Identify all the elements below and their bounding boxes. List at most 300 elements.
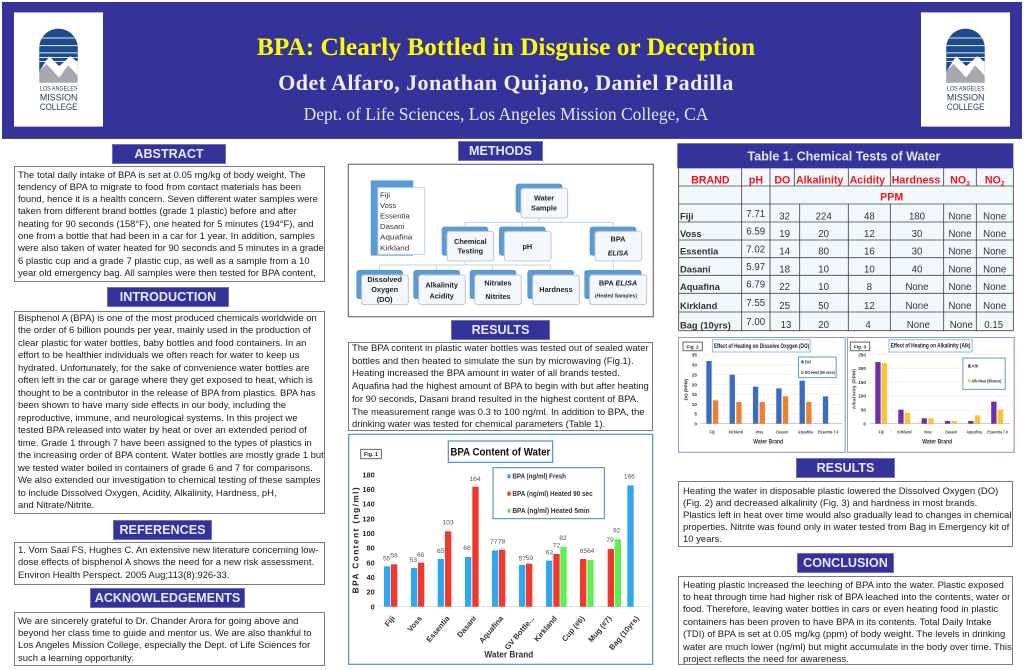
logo: Los Angeles Mission College (left): MISSION	[40, 92, 77, 103]
table brand names: Fiji	[680, 211, 693, 221]
data labels: 82	[559, 535, 567, 542]
text: conclusion: Heating plastic increased the leeching of BPA into the water. Plastic exposed	[683, 580, 1004, 590]
table values: 50	[818, 301, 829, 312]
table values: 40	[912, 264, 922, 275]
table values: None	[948, 229, 972, 240]
table values: None	[905, 282, 929, 293]
y axis: 180	[362, 470, 375, 479]
x axis labels: Aquafina	[798, 430, 814, 435]
x axis labels: Fiji	[383, 614, 397, 628]
box: dissolved oxygen: Dissolved	[367, 275, 402, 284]
heading: results (right)	[796, 458, 895, 478]
table values: 80	[818, 247, 829, 258]
x axis labels: Kirkland	[897, 430, 912, 435]
table header row	[691, 174, 1005, 204]
text: acknowledgements: beyond her class time to guide and mentor us. We are also thankful to	[18, 628, 312, 639]
text: introduction: thought to be a contributor in the release of BPA from plastics. BPA has	[18, 388, 316, 398]
table values: 20	[818, 229, 829, 240]
table values: 18	[779, 264, 790, 275]
table values: 10	[818, 264, 829, 275]
text: references: dose effects of bisphenol A shows the need for a new risk assessment.	[18, 557, 314, 568]
y axis: 200	[858, 366, 866, 371]
figure tag: Fig. 2	[687, 344, 699, 349]
header banner	[2, 2, 1022, 139]
x axis labels: Aquafina	[477, 614, 506, 645]
data labels: 92	[613, 527, 621, 534]
text: references: 1. Vom Saal FS, Hughes C. An extensive new literature concerning low-	[18, 545, 319, 556]
y axis: 160	[362, 485, 375, 494]
data labels: 57	[519, 556, 526, 563]
panel: figure 2 dissolved oxygen chart	[678, 337, 846, 453]
x axis labels: Water Brand	[484, 650, 534, 660]
box: alkalinity and acidity: Acidity	[429, 292, 455, 301]
table values: 180	[909, 211, 925, 222]
box: brand list: Kirkland	[380, 243, 409, 252]
text: abstract: The total daily intake of BPA is set at 0.05 mg/kg of body weight. The	[18, 170, 306, 180]
logo: Los Angeles Mission College (right)	[921, 12, 1010, 127]
text: introduction: reproductive, immune, and neurological systems. In this project we	[18, 412, 297, 424]
x axis labels: Kirkland	[729, 430, 743, 435]
box: brand list: Aquafina	[380, 233, 413, 242]
x axis labels: Dasani	[945, 430, 957, 435]
box: BPA ELISA	[590, 227, 642, 261]
data labels: 72	[553, 543, 560, 550]
y axis: 140	[362, 500, 375, 509]
legend: Alk	[972, 364, 979, 369]
table values: 7.00	[746, 317, 765, 328]
y axis: 250	[858, 352, 866, 357]
bars: alkalinity	[875, 362, 997, 424]
heading: methods: METHODS	[469, 144, 532, 158]
text: conclusion: water are much lower (ng/ml) but might accumulate in the body over time. This	[683, 642, 1012, 653]
table values: 6.59	[746, 227, 765, 238]
figure tag: Fig. 1	[364, 452, 378, 458]
box: dissolved oxygen: Oxygen	[371, 285, 399, 294]
text: acknowledgements: Los Angeles Mission College, especially the Dept. of Life Sciences for	[18, 640, 310, 651]
data labels: 64	[587, 548, 595, 555]
x axis labels: Dasani	[455, 614, 478, 639]
table header row: Hardness	[892, 174, 940, 186]
box: pH	[499, 227, 551, 261]
box: chemical testing	[442, 227, 494, 261]
text: results (right): Heating the water in disposable plastic lowered the Dissolved Oxygen (DO)	[683, 486, 998, 497]
data labels: 103	[442, 519, 454, 526]
table values: 16	[864, 247, 875, 258]
x axis labels: Water Brand	[922, 439, 952, 446]
text: conclusion	[678, 576, 1013, 665]
y axis: 100	[362, 529, 375, 538]
logo: Los Angeles Mission College (right): LOS ANGELES	[947, 85, 985, 92]
table values: 32	[779, 211, 790, 222]
x axis labels	[710, 430, 839, 446]
x axis labels: Water Brand	[753, 439, 783, 446]
bars: fresh	[384, 485, 634, 607]
logo: Los Angeles Mission College (right): COLLEGE	[947, 102, 984, 113]
table values: None	[948, 211, 972, 222]
logo: Los Angeles Mission College (left): LOS ANGELES	[40, 85, 78, 92]
table values: None	[950, 320, 973, 331]
y axis: 30	[692, 363, 697, 368]
text: abstract: heating for 90 seconds (158°F), one heated for 5 minutes (194°F), and	[18, 219, 314, 230]
table values: 10	[818, 282, 829, 293]
table values: 30	[912, 247, 922, 258]
figure tag	[683, 342, 702, 351]
x axis labels: Fiji	[879, 430, 884, 435]
box: BPA ELISA heated samples	[584, 270, 647, 305]
y axis: 50	[861, 408, 866, 413]
x axis labels: Voss	[924, 430, 932, 435]
heading: results (middle): RESULTS	[472, 323, 529, 337]
box: chemical testing: Chemical	[454, 237, 487, 246]
text: abstract: found, hence it is a health concern. Seven different water samples were	[18, 194, 318, 205]
heading: abstract	[112, 144, 226, 164]
heading: conclusion: CONCLUSION	[803, 556, 888, 570]
text: results (right): Plastics left in heat over time would also gradually lead to changes in chemical	[683, 510, 1011, 521]
table values: 20	[818, 320, 829, 331]
x axis labels	[383, 614, 641, 660]
text: results (middle): bottles and then heated to simulate the sun by microwaving (Fig.1).	[352, 356, 634, 367]
text: introduction: we tested water boiled in containers of grade 6 and 7 for comparisons.	[18, 462, 313, 474]
data labels: 55	[383, 555, 391, 562]
text: introduction: the order of 6 billion pounds per year, mainly used in the production of	[18, 325, 311, 336]
y axis: 20	[692, 382, 697, 387]
box: nitrates and nitrites: Nitrates	[484, 278, 512, 287]
data labels: 164	[469, 476, 481, 483]
text: introduction: Bisphenol A (BPA) is one of the most produced chemicals worldwide on	[18, 312, 317, 324]
data labels: 65	[580, 548, 587, 555]
text: results (middle): The measurement range was 0.3 to 100 ng/ml. In addition to BPA, the	[352, 407, 644, 418]
table values: None	[907, 320, 930, 331]
x axis labels: Essentia 7.0	[987, 430, 1008, 435]
text: conclusion: (TDI) of BPA is set at 0.05 mg/kg (ppm) of body weight. The levels in drinking	[683, 629, 1005, 640]
logo: Los Angeles Mission College (right): MISSION	[947, 92, 984, 103]
box: BPA ELISA heated samples: BPA ELISA	[599, 278, 637, 287]
legend: BPA (ng/ml) Heated 90 sec	[512, 491, 593, 498]
box: brand list	[371, 180, 425, 256]
text: results (right): (Fig. 2) and decreased alkalinity (Fig. 3) and hardness in most brands.	[683, 498, 977, 509]
table values: 12	[864, 301, 875, 312]
table values: None	[948, 282, 972, 293]
panel: methods flowchart	[348, 164, 654, 318]
table header row: DO	[774, 174, 790, 186]
table values: None	[983, 264, 1006, 275]
box: dissolved oxygen	[356, 270, 408, 305]
legend	[799, 357, 836, 378]
table header row: 3	[966, 180, 970, 187]
table values: 13	[781, 320, 791, 331]
y axis: 40	[367, 573, 375, 582]
data labels: 63	[546, 550, 553, 557]
y axis: 150	[858, 380, 866, 385]
legend: Alk-Heat (90secs)	[972, 379, 1002, 384]
text: introduction: the increasing order of BPA content. Water bottles are mostly grade 1 but	[18, 450, 324, 461]
heading: abstract: ABSTRACT	[134, 147, 204, 161]
bars: DO heated	[713, 396, 812, 424]
y axis	[851, 352, 866, 426]
text: results (middle)	[348, 342, 653, 431]
bars: DO	[706, 361, 828, 424]
box: pH: pH	[522, 242, 532, 251]
heading: introduction: INTRODUCTION	[120, 290, 216, 304]
table values: 25	[779, 301, 790, 312]
legend	[963, 358, 1005, 389]
data labels: 68	[463, 545, 471, 552]
box: hardness: Hardness	[539, 285, 573, 294]
x axis labels: Aquafina	[967, 430, 982, 435]
y axis: 35	[692, 353, 697, 358]
text: references	[14, 542, 325, 585]
figure tag	[850, 342, 870, 351]
table header row: Acidity	[850, 175, 885, 187]
y axis: 120	[362, 514, 375, 523]
y axis: 25	[692, 372, 697, 377]
table values: 7.71	[746, 209, 765, 220]
table values: 22	[779, 282, 790, 293]
table values: 14	[779, 247, 791, 258]
bars: alkalinity heated	[882, 363, 1003, 424]
text: abstract: year old emergency bag. All samples were then tested for BPA content,	[18, 268, 316, 279]
box: BPA ELISA: ELISA	[608, 250, 628, 257]
heading: results (right): RESULTS	[817, 461, 874, 475]
y axis: 0	[863, 421, 866, 426]
text: results (middle): The BPA content in plastic water bottles was tested out of sealed water	[352, 343, 649, 354]
x axis labels: Fiji	[710, 430, 715, 435]
data labels: 53	[410, 557, 417, 564]
chart title	[713, 340, 810, 352]
text: introduction: clear plastic for water bottles, baby bottles and food containers. In an	[18, 338, 306, 348]
table values: 48	[864, 211, 875, 222]
x axis labels	[879, 430, 1008, 446]
text: introduction: effort to be healthier individuals we often reach for water to keep us	[18, 350, 299, 361]
y axis	[350, 470, 375, 611]
text: results (middle): for 90 seconds, Dasani brand resulted in the highest content of BPA.	[352, 394, 639, 405]
x axis labels: Essentia	[424, 614, 452, 644]
box: nitrates and nitrites	[470, 270, 521, 305]
heading: results (middle)	[451, 320, 550, 340]
legend: BPA (ng/ml) Fresh	[512, 474, 566, 481]
table values: None	[905, 301, 929, 312]
x axis labels: Mug (#7)	[586, 614, 614, 644]
data labels: 78	[498, 538, 506, 545]
table values: None	[948, 301, 972, 312]
text: acknowledgements: such a learning opportunity.	[18, 653, 134, 664]
text: conclusion: food. Therefore, leaving water bottles in cars or even heating food in plastic	[683, 604, 998, 615]
table values: 8	[867, 282, 872, 293]
box: water sample: Water	[534, 194, 554, 203]
y axis: 100	[858, 394, 866, 399]
data labels: 77	[490, 539, 498, 546]
y axis: 0	[371, 602, 375, 611]
table brand names: Bag (10yrs)	[680, 320, 731, 330]
text: results (middle): Aquafina had the highest amount of BPA to begin with but after heating	[352, 381, 649, 392]
text: introduction: We also extended our investigation to chemical testing of these samples	[18, 475, 320, 486]
text: abstract	[14, 166, 325, 282]
legend	[493, 468, 604, 519]
chart title: Effect of Heating on Alkalinity (Alk)	[891, 342, 971, 349]
y axis: DO (PPM)	[683, 378, 688, 400]
logo: Los Angeles Mission College (left): COLLEGE	[40, 102, 77, 113]
box: water sample	[516, 184, 568, 218]
data labels: 58	[390, 553, 398, 560]
table values: None	[983, 301, 1006, 312]
table header row: Alkalinity	[796, 174, 843, 186]
text: abstract: taken from different brand bottles (grade 1 plastic) before and after	[18, 206, 297, 217]
panel: figure 1 bar chart	[348, 434, 654, 665]
text: abstract: one from a bottle that had been in a car for 1 year. In addition, samples	[18, 231, 315, 242]
data labels: 60	[417, 552, 425, 559]
text: references: Environ Health Perspect. 2005 Aug;113(8):926-33.	[18, 570, 229, 581]
heading: references	[113, 520, 212, 540]
table brand names: Kirkland	[680, 301, 718, 311]
y axis: 60	[367, 558, 375, 567]
data labels: 65	[437, 548, 445, 555]
text: introduction: to include Dissolved Oxygen, Acidity, Alkalinity, Hardness, pH,	[18, 488, 277, 498]
table values: None	[983, 211, 1006, 222]
table brand names: Aquafina	[680, 282, 721, 292]
table values: 30	[912, 229, 922, 240]
bars: heated 5 min	[560, 539, 621, 607]
x axis labels: Voss	[756, 430, 764, 435]
y axis: BPA Content (ng/ml)	[350, 487, 360, 593]
text: conclusion: to heat through time had higher risk of BPA leached into the contents, water or	[683, 592, 1010, 603]
heading: introduction	[107, 287, 229, 307]
table header row: 2	[1001, 180, 1005, 187]
text: introduction: been shown to have many side effects in our body, including the	[18, 400, 286, 411]
table header row: NO	[950, 175, 966, 187]
data labels: 166	[624, 474, 635, 481]
box: alkalinity and acidity	[413, 270, 465, 305]
bars: heated 90 sec	[391, 487, 614, 607]
box: brand list: Fiji	[380, 190, 390, 199]
table title: Table 1. Chemical Tests of Water	[748, 149, 941, 163]
table values	[746, 209, 1006, 331]
text: conclusion: project reflects the need for awareness.	[683, 654, 849, 665]
text: acknowledgements	[14, 612, 325, 666]
panel: figure 3 alkalinity chart	[847, 337, 1015, 453]
text: abstract: were also taken of water heated for 90 seconds and 5 minutes in a grade	[18, 243, 324, 254]
table header row: pH	[749, 175, 763, 187]
text: introduction: tested BPA released into water by heat or over an extended period of	[18, 425, 307, 436]
text: introduction	[14, 311, 325, 514]
y axis: 20	[367, 588, 375, 597]
box: BPA ELISA: BPA	[611, 235, 626, 244]
text: results (middle): drinking water was tested for chemical parameters (Table 1).	[352, 419, 605, 430]
table header row: BRAND	[691, 174, 730, 186]
x axis labels: Kirkland	[532, 614, 559, 643]
y axis: 0	[694, 421, 697, 426]
chart title: BPA Content of Water	[450, 447, 551, 459]
table values: None	[983, 282, 1006, 293]
table brand names: Voss	[680, 229, 702, 239]
legend: DO-Heat (90 secs)	[805, 370, 835, 375]
text: introduction: often left in the car or garage where they get exposed to heat, which is	[18, 375, 313, 386]
table header row: PPM	[880, 192, 903, 204]
table title	[677, 143, 1013, 168]
x axis labels: Essentia 7.0	[818, 430, 839, 435]
chart title: Effect of Heating on Dissolve Oxygen (DO)	[714, 343, 809, 350]
x axis labels: Voss	[406, 614, 424, 634]
text: introduction: and Nitrate/Nitrite.	[18, 500, 94, 511]
text: introduction: hydrated. Unfortunately, for the sake of convenience water bottles are	[18, 362, 309, 374]
text: acknowledgements: We are sincerely grateful to Dr. Chander Arora for going above and	[18, 616, 298, 626]
legend: DO	[805, 359, 812, 364]
box: brand list: Voss	[380, 201, 396, 210]
x axis labels: Bag (10yrs)	[607, 614, 641, 652]
table values: None	[983, 229, 1006, 240]
title: BPA: Clearly Bottled in Disguise or Deception	[257, 33, 755, 61]
y axis: Alkalinity (PPM)	[851, 369, 856, 409]
table values: 7.02	[746, 244, 765, 255]
text: results (right): 10 years.	[683, 534, 722, 545]
legend: BPA (ng/ml) Heated 5min	[512, 508, 590, 515]
y axis: 80	[367, 544, 375, 553]
box: brand list: Dasani	[380, 222, 405, 231]
text: results (right): properties. Nitrite was found only in water tested from Bag in Emergency kit of	[683, 522, 1009, 533]
box: chemical testing: Testing	[458, 247, 483, 256]
figure tag: Fig. 3	[854, 344, 866, 349]
heading: acknowledgements	[90, 588, 245, 608]
heading: references: REFERENCES	[119, 523, 206, 537]
chart title	[448, 441, 553, 462]
box: alkalinity and acidity: Alkalinity	[425, 281, 459, 290]
text: abstract: 6 plastic cup and a grade 7 plastic cup, as well as a sample from a 10	[18, 256, 310, 267]
x axis labels: Dasani	[776, 430, 788, 435]
table values: None	[948, 264, 972, 275]
logo: Los Angeles Mission College (left)	[14, 12, 103, 127]
text: introduction: time. Grade 1 through 7 have been assigned to the types of plastics in	[18, 438, 312, 448]
y axis: 5	[694, 412, 697, 417]
box: hardness	[527, 270, 579, 305]
table values: 6.79	[746, 280, 765, 291]
figure tag	[361, 449, 381, 459]
table brand names	[680, 211, 731, 330]
heading: acknowledgements: ACKNOWLEDGEMENTS	[95, 591, 240, 605]
table values: 19	[779, 229, 790, 240]
table brand names: Essentia	[680, 247, 719, 257]
table values: 224	[816, 211, 832, 222]
table values: 4	[865, 320, 871, 331]
y axis	[683, 353, 697, 426]
box: nitrates and nitrites: Nitrites	[485, 292, 511, 301]
table values: 5.97	[746, 262, 765, 273]
box: brand list: Essentia	[380, 211, 410, 220]
y axis: 15	[692, 392, 697, 397]
text: results (right)	[678, 481, 1013, 547]
box: dissolved oxygen: (DO)	[377, 295, 393, 304]
text: conclusion: containers has been proven to have BPA in its contents. Total Daily Intake	[683, 617, 992, 628]
x axis labels: Cup (#6)	[560, 614, 587, 643]
table values: 0.15	[984, 320, 1003, 331]
y axis: 10	[692, 402, 697, 407]
table brand names: Dasani	[680, 264, 711, 274]
table values: None	[983, 247, 1006, 258]
text: abstract: tendency of BPA to migrate to food from contact materials has been	[18, 182, 301, 193]
box: water sample: Sample	[531, 204, 557, 213]
data labels: 59	[526, 555, 533, 562]
text: results (middle): Heating increased the BPA amount in water of all brands tested.	[352, 368, 620, 379]
x axis labels: GV Bottle...	[503, 614, 536, 652]
table values: None	[948, 247, 972, 258]
table values: 7.55	[746, 298, 765, 309]
data labels: 79	[606, 537, 614, 544]
affiliation: Dept. of Life Sciences, Los Angeles Mission College, CA	[304, 104, 708, 124]
table: chemical tests of water	[677, 143, 1014, 332]
table values: 12	[864, 229, 875, 240]
heading: conclusion	[797, 553, 894, 573]
data labels	[383, 474, 635, 564]
heading: methods	[458, 141, 543, 161]
chart title	[889, 340, 972, 352]
